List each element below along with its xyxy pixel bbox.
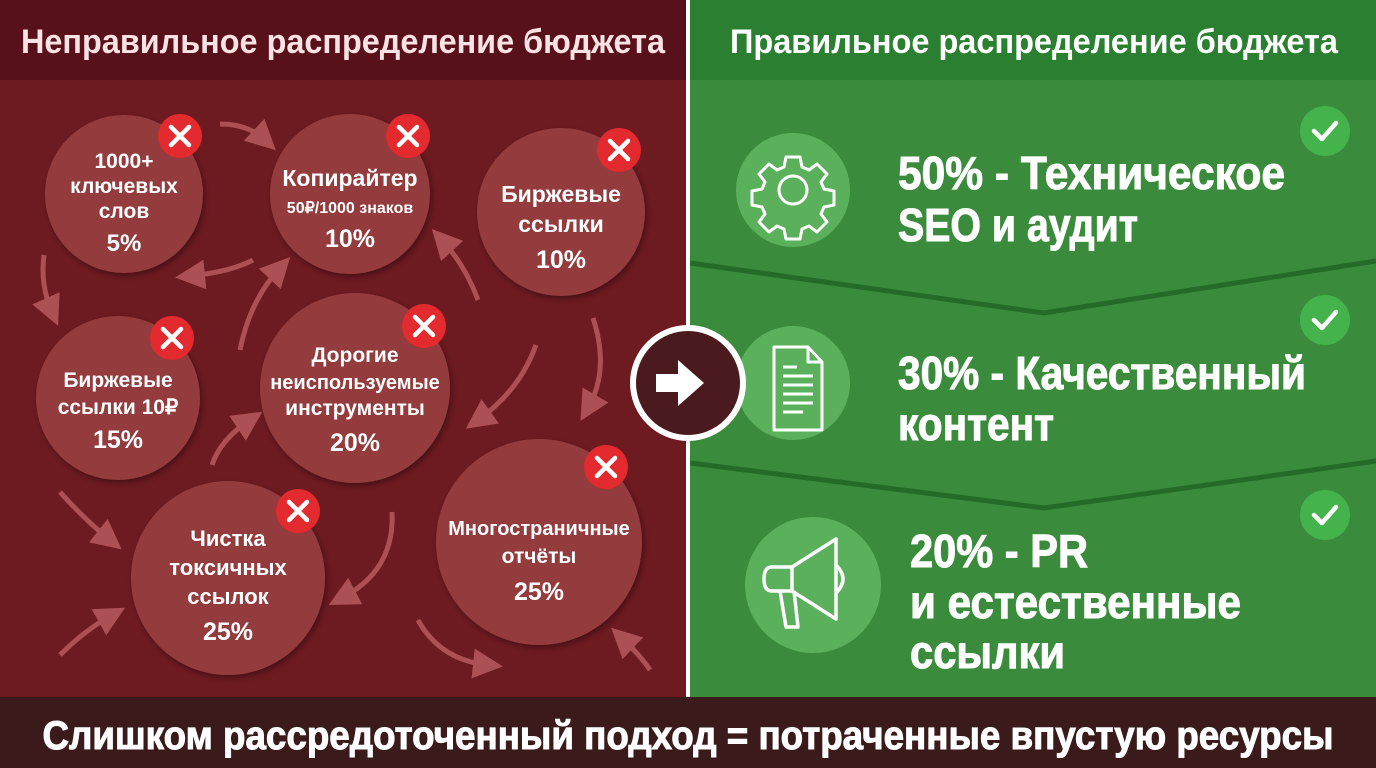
circle: expensive tools <box>260 293 450 483</box>
circle: expensive tools: инструменты <box>285 397 425 420</box>
icon: gear <box>736 133 850 247</box>
icons: green check badges <box>1300 106 1350 540</box>
circle: exchange links <box>477 128 645 296</box>
circle: copywriter: 10% <box>325 225 375 253</box>
circle: exchange links: 10% <box>536 246 586 274</box>
item: PR: ссылки <box>910 626 1065 678</box>
icon: megaphone <box>745 517 881 653</box>
circle: 1000+ keywords <box>45 115 203 273</box>
panel: wrong distribution <box>0 0 686 697</box>
circle: 1000+ keywords: ключевых <box>70 175 178 198</box>
arrows: chaotic cycle <box>43 124 650 670</box>
circle: multipage reports: отчёты <box>502 545 576 568</box>
item: technical SEO: SEO и аудит <box>898 199 1138 251</box>
circle: toxic links cleanup: ссылок <box>187 584 270 609</box>
icon: document <box>736 326 850 440</box>
circle: exchange links 10 rub: ссылки 10₽ <box>58 396 179 419</box>
item: PR: и естественные <box>910 576 1241 628</box>
circle: exchange links 10 rub: 15% <box>93 426 143 454</box>
item: technical SEO <box>736 133 1285 251</box>
icon: center arrow <box>633 328 743 438</box>
item: content: 30% - Качественный <box>898 347 1306 399</box>
icons: red X badges <box>150 114 641 533</box>
item: PR <box>745 517 1241 678</box>
circle: multipage reports: Многостраничные <box>448 518 630 540</box>
item: PR: 20% - PR <box>910 525 1088 577</box>
circle: toxic links cleanup: 25% <box>203 618 253 646</box>
circle: toxic links cleanup: Чистка <box>190 526 266 551</box>
circle: 1000+ keywords: слов <box>99 200 149 223</box>
circle: expensive tools: 20% <box>330 429 380 457</box>
circle: toxic links cleanup: токсичных <box>169 555 288 580</box>
footer: conclusion <box>0 697 1376 768</box>
dividers: chevrons <box>690 261 1376 508</box>
circle: 1000+ keywords: 5% <box>107 230 141 257</box>
heading: wrong: Неправильное распределение бюджета <box>21 23 666 61</box>
circle: 1000+ keywords: 1000+ <box>95 150 153 173</box>
circle: expensive tools: неиспользуемые <box>270 372 440 394</box>
heading: right <box>690 0 1376 80</box>
circle: copywriter: 50₽/1000 знаков <box>287 200 413 217</box>
item: content <box>736 326 1306 450</box>
circle: copywriter <box>270 114 430 274</box>
circle: exchange links 10 rub <box>36 316 200 480</box>
circle: toxic links cleanup <box>131 481 325 675</box>
item: content: контент <box>898 398 1054 450</box>
item: technical SEO: 50% - Техническое <box>898 147 1285 199</box>
panel: right distribution <box>690 0 1376 697</box>
circle: exchange links: Биржевые <box>501 181 621 207</box>
heading: right: Правильное распределение бюджета <box>730 23 1339 61</box>
circle: multipage reports: 25% <box>514 578 564 606</box>
circle: exchange links 10 rub: Биржевые <box>63 369 173 392</box>
circle: expensive tools: Дорогие <box>311 344 399 367</box>
circle: exchange links: ссылки <box>518 211 604 237</box>
circle: copywriter: Копирайтер <box>282 165 418 191</box>
heading: wrong <box>0 0 686 80</box>
circle: multipage reports <box>436 439 642 645</box>
